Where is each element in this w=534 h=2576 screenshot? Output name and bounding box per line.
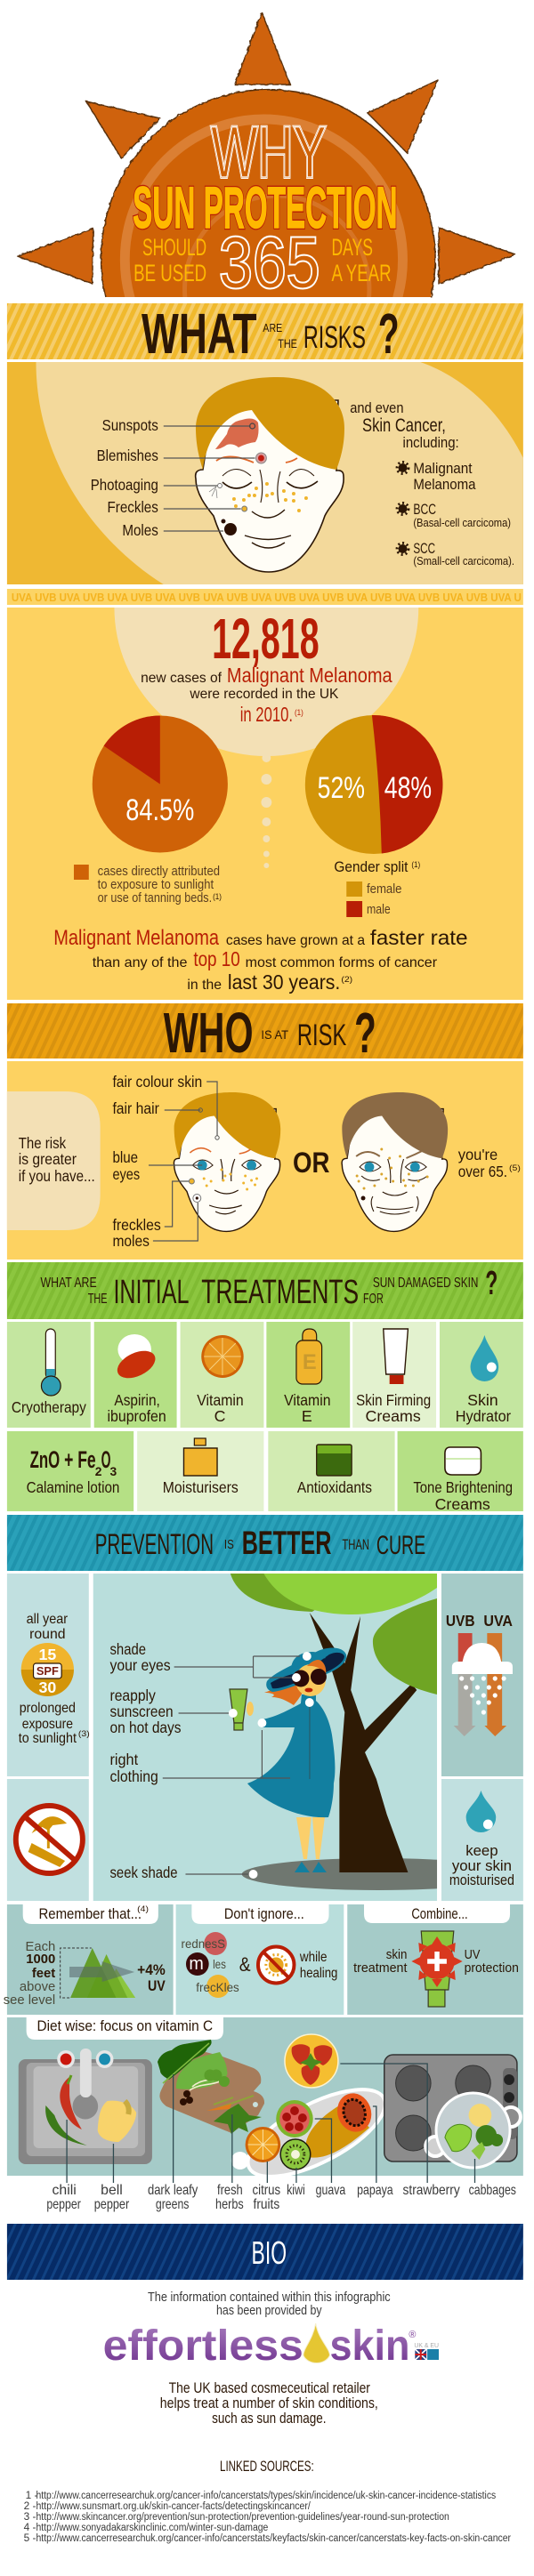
risk labels: Photoaging <box>91 476 158 494</box>
skin cancer text: (Small-cell carcicoma). <box>413 554 514 568</box>
face with skin problems <box>196 377 344 572</box>
skin cancer text: including: <box>402 434 459 451</box>
prevention labels <box>109 1640 182 1881</box>
SPF badge: SPF <box>36 1664 59 1678</box>
altitude text: see level <box>4 1993 55 2008</box>
banner: initial treatments <box>7 1262 523 1319</box>
diet labels: kiwi <box>287 2183 305 2198</box>
icon: tube with sun and plus <box>411 1931 463 2007</box>
pie chart 84.5% <box>93 715 228 852</box>
panel: keep skin moisturised: your skin <box>452 1857 512 1874</box>
melanoma growth statement: Malignant Melanoma <box>53 926 220 950</box>
legend: cases attributed: (1) <box>213 892 222 901</box>
panel: don't ignore <box>176 1904 344 2015</box>
callout lines <box>164 423 266 531</box>
title WHY: WHY <box>211 112 327 193</box>
title days a year: DAYS <box>331 234 373 261</box>
UV rays <box>458 1633 502 1665</box>
cell: moisturisers: Moisturisers <box>163 1478 239 1496</box>
cutting board with greens <box>158 2040 264 2134</box>
cream note: is greater <box>19 1150 77 1168</box>
panel: risks face <box>7 362 523 584</box>
risk labels: Moles <box>122 521 158 539</box>
logo: effortless skin: ® <box>409 2330 416 2340</box>
over 65 text: over 65. <box>458 1163 507 1180</box>
bio description: such as sun damage. <box>212 2410 327 2427</box>
prevention labels: on hot days <box>109 1719 182 1736</box>
young face <box>174 1092 280 1231</box>
cell: cryotherapy: Cryotherapy <box>12 1398 86 1416</box>
stat caption: Malignant Melanoma <box>227 664 392 687</box>
fruit platter <box>231 2073 397 2194</box>
ampersand: & <box>239 1953 251 1976</box>
sunscreen tube <box>230 1689 254 1730</box>
woman <box>247 1647 346 1872</box>
melanoma growth statement: top 10 <box>193 947 240 970</box>
banner: bio <box>7 2224 523 2280</box>
OR: OR <box>293 1147 330 1179</box>
banner: initial treatments: FOR <box>363 1292 384 1307</box>
panel: woman under tree <box>93 1574 438 1901</box>
melanoma growth statement: than any of the <box>93 955 188 970</box>
melanoma growth statement <box>53 926 468 994</box>
altitude text: feet <box>32 1967 55 1981</box>
mountain graphic <box>61 1948 135 1998</box>
cell: calamine lotion: 2 <box>95 1464 102 1478</box>
combine text: UV <box>465 1948 480 1962</box>
stove <box>384 2055 517 2161</box>
bio intro text: has been provided by <box>216 2304 322 2318</box>
cell: skin firming creams <box>352 1322 436 1428</box>
source list <box>24 2489 511 2544</box>
source list: 1 - <box>26 2489 37 2501</box>
plus 4 percent UV: +4% <box>137 1961 166 1978</box>
prevention labels: seek shade <box>109 1864 178 1881</box>
all year text: all year <box>27 1612 69 1627</box>
panel: UVB UVA: UVB <box>446 1612 475 1630</box>
title SUN PROTECTION <box>133 175 398 240</box>
stat caption: new cases of <box>141 671 222 686</box>
prolonged exposure text: to sunlight <box>19 1731 77 1746</box>
cell: calamine lotion <box>7 1431 134 1511</box>
stat caption: were recorded in the UK <box>189 687 339 702</box>
banner: who is at risk: RISK <box>297 1018 347 1052</box>
legend: gender split: Gender split <box>334 858 409 875</box>
warning signs list <box>182 1932 239 1998</box>
diet labels <box>46 2183 516 2212</box>
stat caption <box>141 664 392 726</box>
altitude text <box>4 1940 55 2008</box>
prevention labels: reapply <box>109 1686 156 1704</box>
risk callouts <box>149 1082 219 1241</box>
pie chart gender split: 48% <box>384 771 432 805</box>
panel: no sunbathing <box>7 1779 89 1901</box>
melanoma growth statement: cases have grown at a <box>226 933 365 948</box>
over 65 text <box>458 1146 521 1180</box>
source list: 2 - <box>24 2500 36 2512</box>
risk labels: Sunspots <box>102 416 158 434</box>
banner: who is at risk: ? <box>354 1002 376 1065</box>
cell: tone brightening creams: Tone Brightening <box>413 1478 513 1496</box>
diet labels: fresh <box>217 2183 243 2198</box>
bubble dots <box>261 753 271 868</box>
over 65 text: you're <box>458 1146 498 1163</box>
cell: calamine lotion: 3 <box>109 1464 117 1478</box>
banner: prevention is better than cure: PREVENTION <box>95 1528 214 1560</box>
panel: diet <box>7 2017 523 2194</box>
treatment row two <box>7 1431 523 1513</box>
combine text: treatment <box>353 1961 408 1976</box>
risk labels: Freckles <box>108 498 158 516</box>
all year text <box>27 1612 69 1642</box>
SPF badge: 15 <box>38 1646 56 1663</box>
risk labels: blue <box>112 1148 138 1166</box>
altitude text: 1000 <box>26 1952 55 1967</box>
melanoma growth statement: last 30 years. <box>228 970 340 994</box>
melanoma growth statement: faster rate <box>370 926 468 949</box>
cell: vitamin E <box>266 1322 350 1428</box>
risk labels: fair colour skin <box>112 1073 202 1091</box>
cream note <box>7 1091 101 1230</box>
cell: aspirin <box>94 1322 177 1428</box>
while healing: healing <box>300 1966 337 1981</box>
source list: http://www.skincancer.org/prevention/sun-protection/prevention-guidelines/year-round-sun-protection <box>36 2510 449 2523</box>
bio description: helps treat a number of skin conditions, <box>160 2395 378 2411</box>
banner: prevention is better than cure: IS <box>224 1538 234 1552</box>
diet labels: citrus <box>253 2183 280 2198</box>
panel: UVB UVA: UVA <box>483 1612 513 1630</box>
prolonged exposure text <box>19 1701 90 1746</box>
cabbage pot <box>425 2093 521 2168</box>
cream bubble <box>114 608 418 756</box>
cell: vitamin E: E <box>302 1407 312 1425</box>
prevention labels: shade <box>109 1640 146 1658</box>
cell: vitamin E: Vitamin <box>284 1391 330 1409</box>
pie chart 84.5%: 84.5% <box>125 793 194 827</box>
panel: don't ignore: Don't ignore... <box>224 1905 304 1922</box>
while healing: while <box>299 1950 328 1965</box>
cell: antioxidants <box>268 1431 395 1511</box>
SPF badge: 30 <box>38 1678 56 1696</box>
risk labels: eyes <box>112 1165 140 1183</box>
prolonged exposure text: exposure <box>22 1717 73 1732</box>
banner: initial treatments: ? <box>485 1265 498 1302</box>
cell: skin hydrator: Hydrator <box>456 1407 511 1425</box>
banner: initial treatments: THE <box>88 1292 108 1307</box>
panel: keep skin moisturised: moisturised <box>449 1872 514 1888</box>
title should be used: BE USED <box>134 260 206 286</box>
panel: keep skin moisturised <box>441 1779 523 1901</box>
skin cancer text: BCC <box>413 501 436 518</box>
warning signs list: les <box>213 1957 226 1971</box>
heading: linked sources: LINKED SOURCES: <box>220 2458 314 2475</box>
panel: keep skin moisturised: keep <box>465 1842 498 1859</box>
title WHY: WHY <box>211 112 327 193</box>
cream note: if you have... <box>19 1167 95 1185</box>
legend: gender split <box>334 858 420 917</box>
sun rays <box>18 12 515 284</box>
plus 4 percent UV: UV <box>148 1977 166 1994</box>
big number: 12,818 <box>212 608 320 671</box>
title 365: 365 <box>219 222 320 303</box>
stat caption: (1) <box>295 708 303 717</box>
banner: who is at risk: IS AT <box>261 1027 289 1042</box>
stat caption: in 2010. <box>240 703 293 726</box>
icon: no beach <box>16 1806 83 1873</box>
banner: initial treatments: SUN DAMAGED SKIN <box>373 1276 478 1291</box>
skin cancer text: SCC <box>413 540 435 557</box>
cell: calamine lotion: Calamine lotion <box>27 1478 119 1496</box>
melanoma growth statement: most common forms of cancer <box>246 955 438 970</box>
banner: prevention is better than cure <box>7 1515 523 1571</box>
source list: 5 - <box>24 2532 36 2544</box>
cell: vitamin E: E <box>303 1350 317 1374</box>
legend: gender split: female <box>367 882 402 897</box>
diet labels: greens <box>156 2197 189 2212</box>
panel: remember that: (4) <box>137 1904 149 1913</box>
SPF badge <box>21 1643 74 1696</box>
title should be used <box>134 234 206 286</box>
kitchen sink <box>19 2049 152 2164</box>
title WHY: WHY <box>211 112 327 193</box>
panel: melanoma statistics <box>7 608 523 1000</box>
panel: combine: Combine... <box>411 1905 468 1922</box>
altitude text: above <box>20 1980 55 1994</box>
diet labels: chili <box>53 2183 77 2198</box>
prevention labels: right <box>109 1751 138 1768</box>
logo: effortless skin: effortless <box>103 2322 303 2370</box>
legend: gender split: male <box>367 903 391 917</box>
cell: vitamin C: Vitamin <box>197 1391 244 1409</box>
treatment row one <box>7 1322 523 1428</box>
icon: no sun <box>258 1946 294 1984</box>
diet labels: fruits <box>254 2197 279 2212</box>
source list: http://www.sunsmart.org.uk/skin-cancer-facts/detectingskincancer/ <box>36 2500 311 2512</box>
diet labels: herbs <box>215 2197 244 2212</box>
prevention labels: your eyes <box>109 1656 171 1674</box>
banner: initial treatments: INITIAL <box>113 1274 189 1311</box>
skin cancer text: and even <box>350 399 403 416</box>
banner: prevention is better than cure: THAN <box>342 1536 369 1553</box>
over 65 text: (5) <box>509 1163 521 1172</box>
legend: cases attributed: or use of tanning beds. <box>98 891 212 906</box>
legend: cases attributed: to exposure to sunlight <box>98 878 214 892</box>
prevention labels: sunscreen <box>109 1703 174 1720</box>
banner: what are the risks: ARE <box>263 321 282 334</box>
cell: calamine lotion: O <box>101 1446 110 1473</box>
cream note: The risk <box>19 1134 66 1152</box>
banner: what are the risks: THE <box>278 336 297 350</box>
sunscreen dots <box>459 1676 506 1715</box>
tab heading: Diet wise: focus on vitamin C <box>36 2017 213 2034</box>
skin cancer text: (Basal-cell carcicoma) <box>413 516 511 529</box>
while healing <box>299 1950 337 1981</box>
tree <box>231 1574 437 1872</box>
source list: http://www.sonyadakarskinclinic.com/winter-sun-damage <box>36 2521 269 2533</box>
risk labels: fair hair <box>112 1099 159 1117</box>
diet labels: pepper <box>94 2197 130 2212</box>
risk labels: moles <box>112 1232 150 1250</box>
banner: what are the risks: ? <box>378 302 400 366</box>
bio description: The UK based cosmeceutical retailer <box>169 2379 370 2396</box>
title days a year <box>331 234 392 286</box>
panel: combine <box>347 1904 523 2015</box>
panel: UVB UVA <box>441 1574 523 1776</box>
warning signs list: rednesS <box>182 1936 225 1951</box>
tree shadow <box>242 1858 437 1890</box>
banner: what are the risks: WHAT <box>142 302 257 366</box>
legend: cases attributed <box>74 865 222 906</box>
combine text: skin <box>386 1948 407 1962</box>
melanoma growth statement: (2) <box>341 975 352 984</box>
sunscreen cloud <box>452 1643 513 1674</box>
cell: calamine lotion: ZnO <box>30 1446 60 1473</box>
diet labels: bell <box>101 2183 123 2198</box>
logo: effortless skin: skin <box>329 2322 409 2370</box>
all year text: round <box>29 1627 66 1642</box>
cell: moisturisers <box>137 1431 263 1511</box>
skin cancer text: Malignant <box>413 460 473 477</box>
cell: tone brightening creams: Creams <box>435 1495 490 1513</box>
title WHY <box>211 112 327 193</box>
banner: prevention is better than cure: BETTER <box>242 1525 331 1561</box>
diet labels: strawberry <box>402 2183 460 2198</box>
combine text <box>353 1948 519 1976</box>
banner: what are the risks: RISKS <box>303 321 366 355</box>
banner: what are the risks <box>7 302 523 366</box>
title days a year: A YEAR <box>331 260 392 286</box>
panel: SPF advice <box>7 1574 90 1776</box>
source list: 3 - <box>24 2510 36 2523</box>
strawberries on plate <box>285 2034 338 2088</box>
bio intro text <box>148 2290 391 2318</box>
risk labels: freckles <box>112 1216 161 1234</box>
warning signs list: m <box>189 1954 204 1974</box>
banner: who is at risk <box>7 1002 523 1065</box>
sun disc <box>100 89 436 298</box>
legend: gender split: (1) <box>411 860 420 869</box>
source list: 4 - <box>24 2521 36 2533</box>
diet callout lines <box>67 2064 475 2183</box>
bio description <box>160 2379 378 2427</box>
cell: aspirin: Aspirin, <box>114 1391 160 1409</box>
skin cancer text: Melanoma <box>413 476 476 493</box>
melanoma growth statement: in the <box>187 978 222 993</box>
cell: tone brightening creams <box>398 1431 523 1513</box>
banner: prevention is better than cure: CURE <box>376 1531 425 1560</box>
cell: cryotherapy <box>7 1322 91 1428</box>
cell: aspirin: ibuprofen <box>108 1407 166 1425</box>
prolonged exposure text: (3) <box>78 1729 90 1738</box>
diet labels: papaya <box>357 2183 393 2198</box>
cell: vitamin C <box>181 1322 263 1428</box>
risk labels <box>91 416 158 539</box>
cell: skin firming creams: Skin Firming <box>356 1391 431 1409</box>
diet labels: cabbages <box>469 2183 516 2198</box>
cell: skin hydrator <box>440 1322 523 1428</box>
risk labels: Blemishes <box>97 447 158 464</box>
cell: antioxidants: Antioxidants <box>297 1478 372 1496</box>
cell: skin hydrator: Skin <box>467 1391 498 1409</box>
pie chart gender split: 52% <box>318 771 365 805</box>
panel: who is at risk <box>7 1061 523 1260</box>
plus 4 percent UV <box>137 1961 166 1994</box>
bio intro text: The information contained within this infographic <box>148 2290 391 2305</box>
cell: vitamin C: C <box>214 1407 225 1425</box>
banner: bio: BIO <box>252 2235 287 2271</box>
cell: calamine lotion: + Fe <box>64 1446 96 1473</box>
diet labels: dark leafy <box>148 2183 198 2198</box>
arrows <box>454 1674 506 1736</box>
logo: effortless skin: UK & EU <box>414 2343 439 2349</box>
banner: initial treatments: TREATMENTS <box>201 1274 359 1311</box>
panel: remember that <box>4 1904 174 2015</box>
panel: remember that: Remember that... <box>38 1905 142 1922</box>
sun illustration with title <box>16 12 516 298</box>
callout lines <box>163 1652 314 1879</box>
prolonged exposure text: prolonged <box>20 1701 76 1716</box>
diet labels: guava <box>316 2183 345 2198</box>
legend: cases attributed: cases directly attributed <box>98 865 220 879</box>
risk labels <box>112 1073 202 1250</box>
banner: who is at risk: WHO <box>164 1002 254 1065</box>
pie chart gender split <box>305 715 443 854</box>
cancer bullets <box>397 463 409 555</box>
chili peppers and bell pepper <box>45 2075 136 2145</box>
skin cancer text <box>350 399 514 568</box>
older face <box>342 1092 448 1231</box>
skin cancer text: Skin Cancer, <box>362 415 446 436</box>
altitude text: Each <box>25 1940 55 1954</box>
combine text: protection <box>465 1961 519 1976</box>
title 365: 365 <box>219 222 320 303</box>
logo: effortless skin <box>103 2322 439 2370</box>
cell: skin firming creams: Creams <box>366 1407 421 1425</box>
prevention labels: clothing <box>109 1767 158 1785</box>
banner: initial treatments: WHAT ARE <box>40 1276 97 1291</box>
title should be used: SHOULD <box>142 234 206 261</box>
warning signs list: frecKles <box>196 1980 239 1994</box>
diet labels: pepper <box>46 2197 81 2212</box>
